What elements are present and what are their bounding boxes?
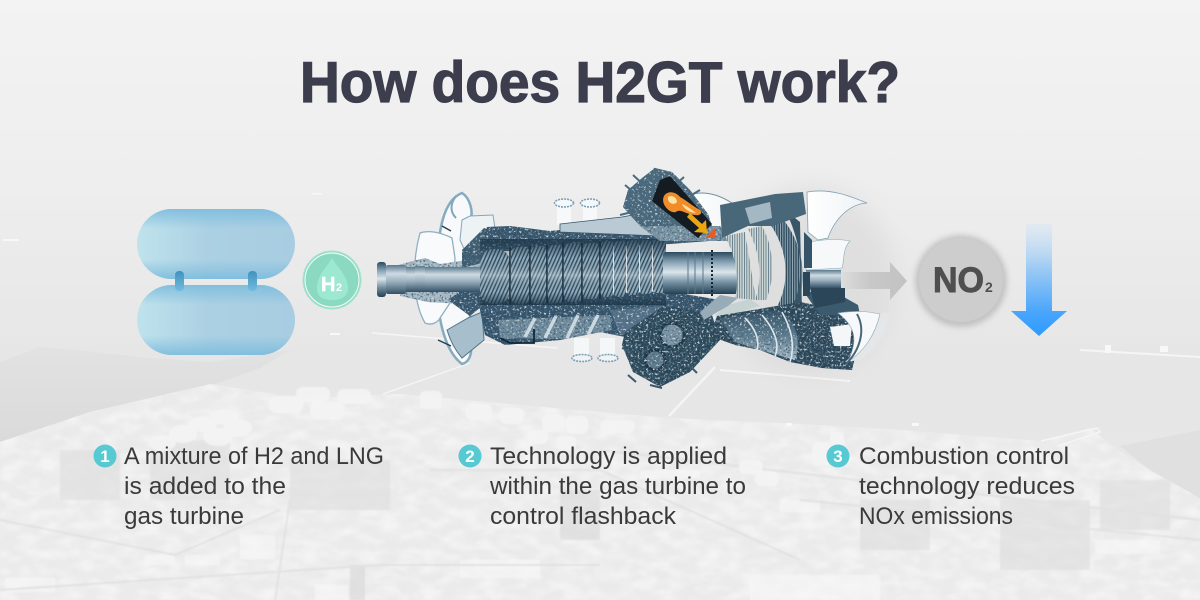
soft shadow behind turbine (725, 185, 895, 375)
compressor casing (478, 220, 722, 345)
upper combustor cluster (623, 168, 730, 242)
lower combustor bolts (622, 348, 697, 388)
rear shaft (803, 270, 845, 308)
badge 3 (826, 444, 850, 468)
front support struts (398, 228, 494, 316)
compressor bleed ports (554, 199, 720, 362)
compressor stages (480, 239, 666, 305)
rear casing (710, 302, 860, 370)
icon: H2 droplet badge (303, 251, 361, 309)
badge 2: 2 (465, 447, 475, 466)
lower combustor cluster (622, 305, 720, 387)
white combustor housing (683, 193, 755, 232)
step 1 text (124, 443, 384, 530)
step 2 (458, 443, 746, 530)
storage tanks in the background (148, 387, 844, 486)
step 3 text: Combustion control (859, 443, 1069, 470)
icon: H2 droplet badge: 2 (336, 282, 342, 294)
step 1 text: gas turbine (124, 503, 244, 530)
step 3 (826, 443, 1075, 530)
arrow: NOx reduction (1011, 224, 1067, 336)
background: aerial view of industrial plant (0, 193, 1200, 600)
step 3 text (859, 443, 1075, 530)
icon: hydrogen and LNG storage tanks (137, 209, 295, 355)
step 2 text (489, 443, 746, 530)
title: How does H2GT work? (300, 51, 900, 115)
turbine inlet bellmouth (415, 193, 495, 364)
icon: NO2 emission badge: NO (933, 261, 984, 300)
icon: H2 droplet badge: H (321, 274, 335, 296)
step 1 text: A mixture of H2 and LNG (124, 443, 384, 470)
step 2 text: Technology is applied (490, 443, 727, 470)
step 2 text: control flashback (490, 503, 677, 530)
step 1 text: is added to the (124, 473, 286, 500)
arrow: exhaust to NO2 (840, 262, 907, 300)
flame (663, 192, 701, 215)
turbine section blades (700, 192, 806, 320)
illustration: gas turbine cutaway (377, 168, 891, 388)
badge 3: 3 (833, 447, 843, 466)
exhaust shells (804, 191, 891, 364)
flow arrow: yellow (687, 213, 707, 233)
step 3 text: technology reduces (859, 473, 1075, 500)
step 2 text: within the gas turbine to (489, 473, 746, 500)
rear casing ribs (745, 312, 792, 362)
step 3 text: NOx emissions (859, 503, 1013, 530)
combustor flame window (652, 176, 715, 238)
casing ribs (525, 315, 598, 338)
badge 2 (458, 444, 482, 468)
step 1 (94, 443, 384, 530)
badge 1 (94, 444, 116, 468)
badge 1: 1 (100, 447, 110, 466)
combustor bolts (620, 168, 700, 215)
central rotor (663, 250, 741, 296)
icon: NO2 emission badge: 2 (985, 279, 993, 295)
front shaft and flange (377, 262, 482, 297)
icon: NO2 emission badge (915, 235, 1007, 327)
hot gas wedge (705, 228, 715, 238)
